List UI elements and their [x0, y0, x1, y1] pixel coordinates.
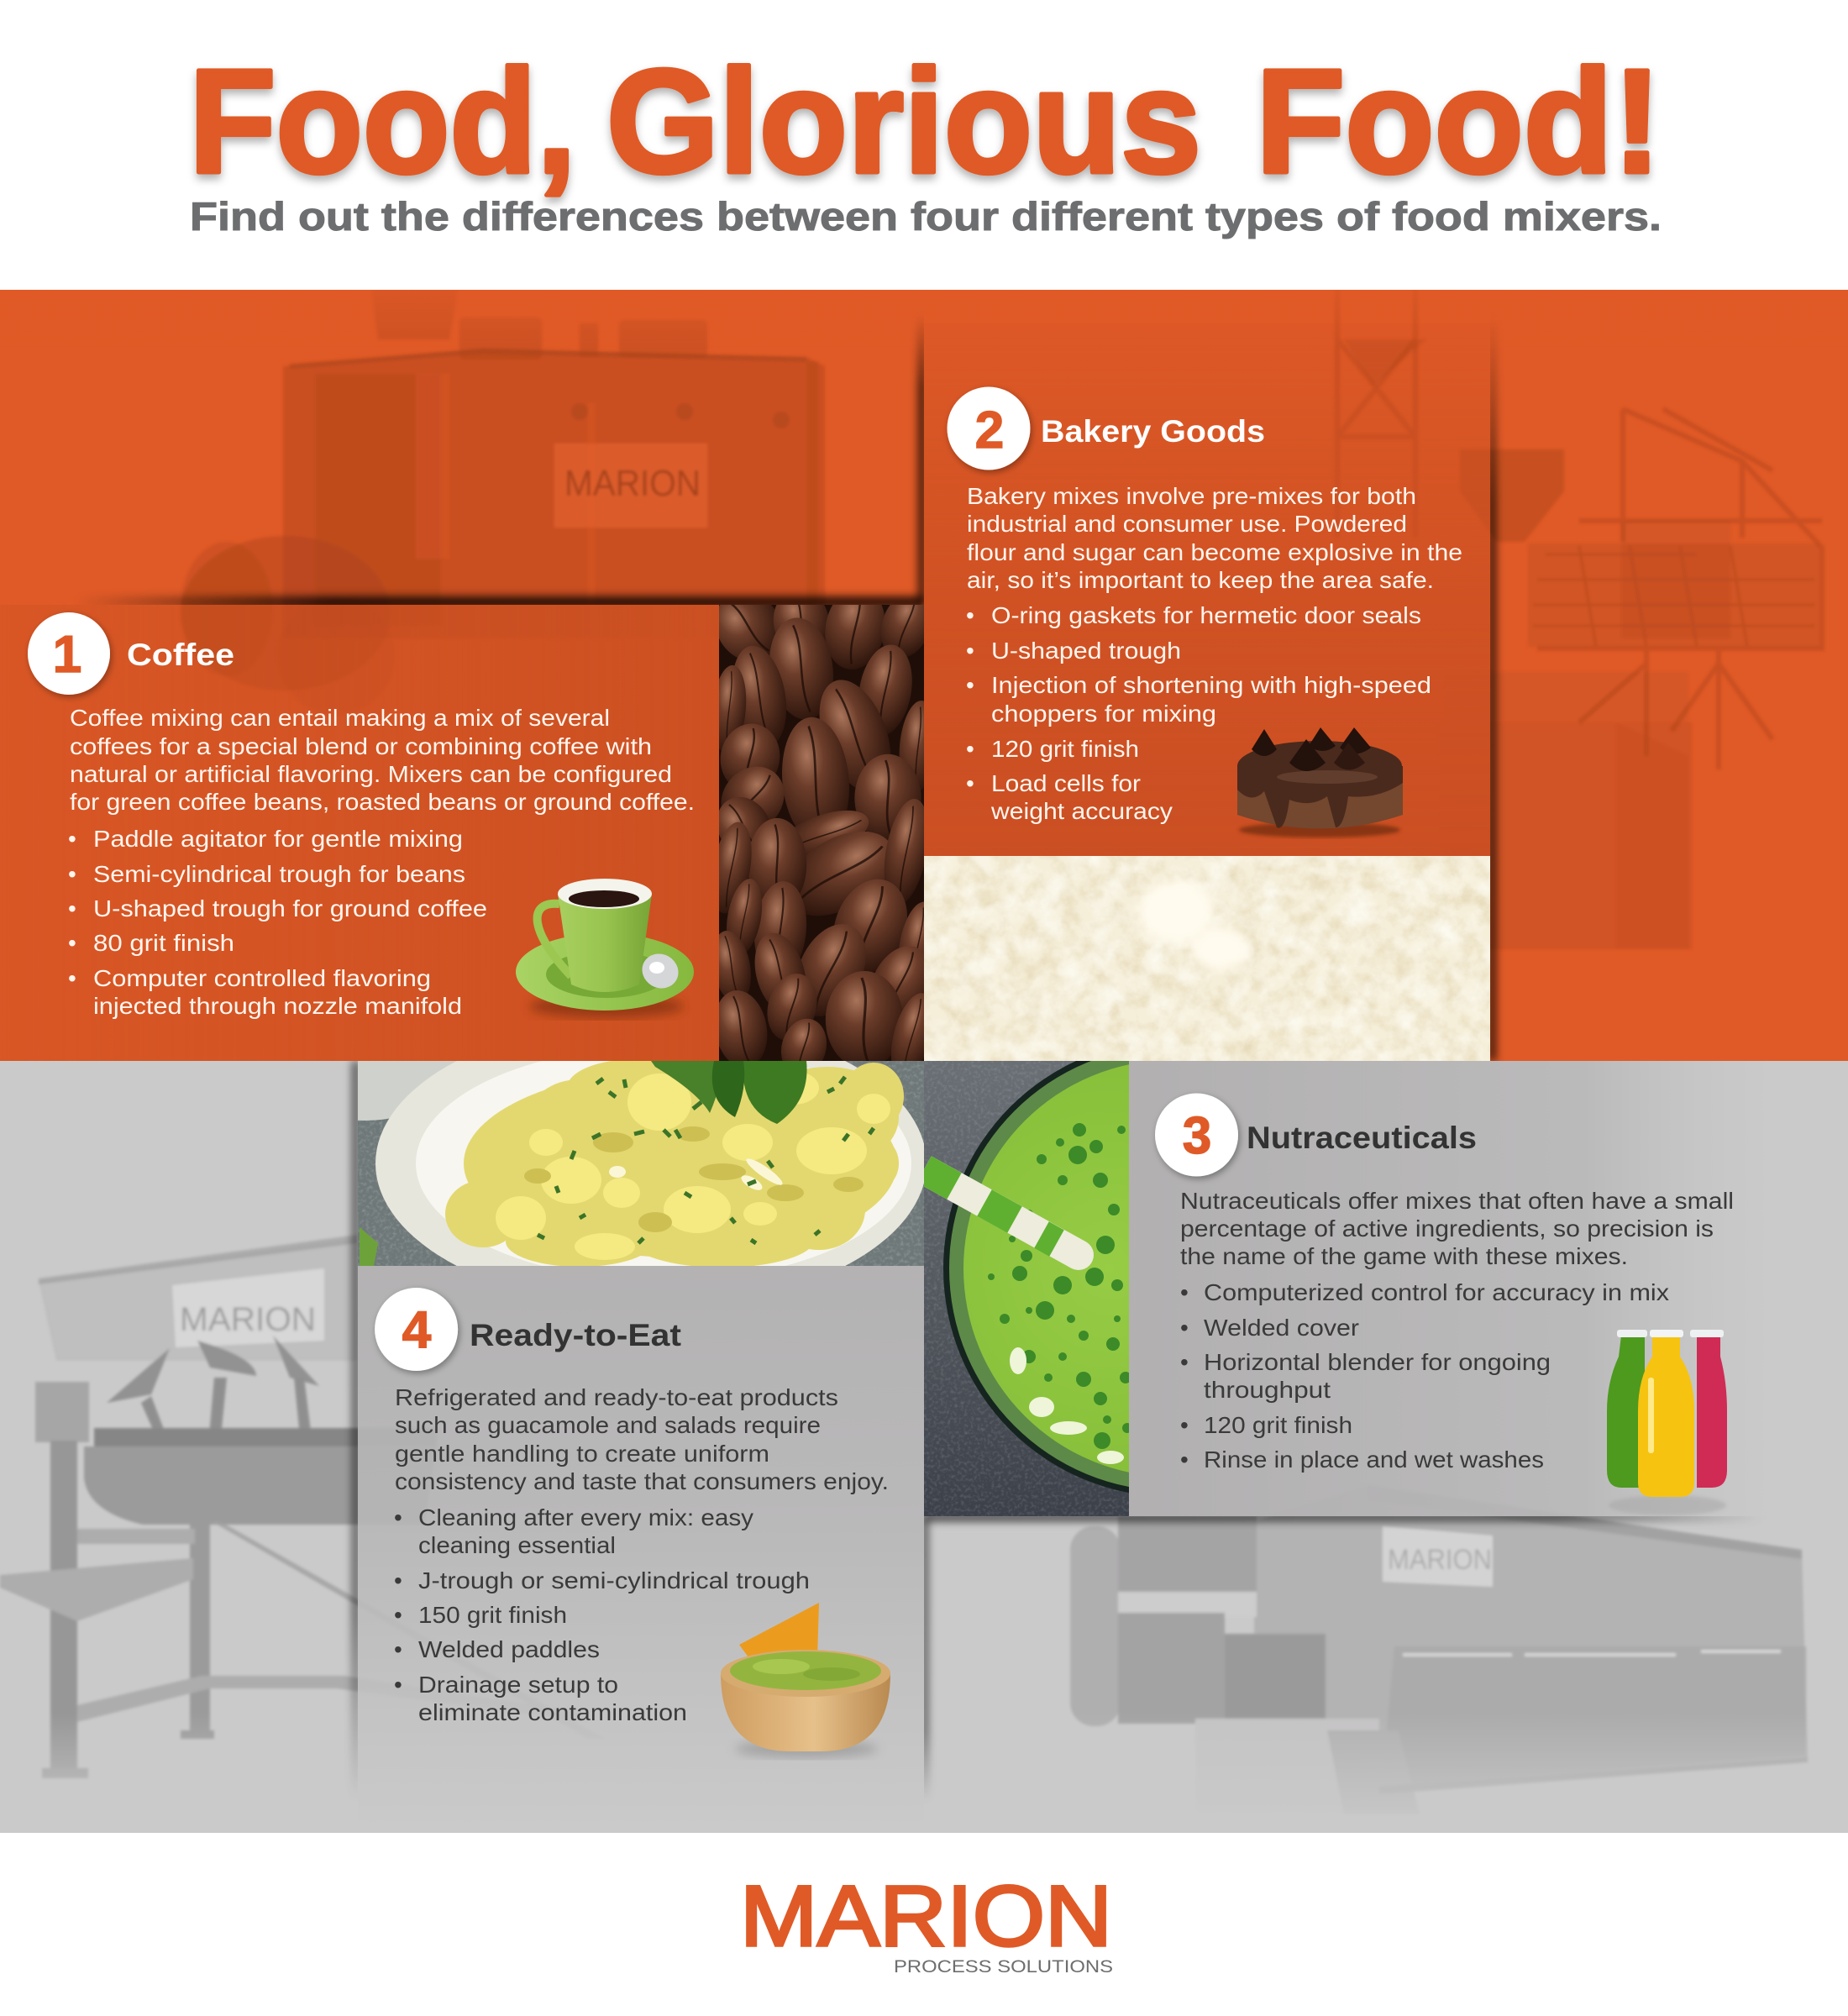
ready-to-eat description: gentle handling to create uniform — [395, 1441, 769, 1467]
title: Glorious — [606, 39, 1201, 204]
panel 4 left shadow — [352, 1061, 360, 1800]
nutraceuticals bullet list: • — [1180, 1349, 1189, 1375]
bakery description: industrial and consumer use. Powdered — [967, 511, 1407, 537]
ready-to-eat bullet list: • — [394, 1602, 402, 1628]
coffee description: for green coffee beans, roasted beans or ground coffee. — [70, 789, 695, 815]
orange background band — [0, 290, 1848, 1061]
logo tagline: PROCESS SOLUTIONS — [894, 1957, 1113, 1977]
bakery description — [967, 483, 1462, 593]
number badge 1: 1 — [53, 626, 81, 684]
icon: chocolate cake — [1237, 727, 1403, 837]
ready-to-eat description — [395, 1384, 889, 1494]
bakery bullet list: Injection of shortening with high-speed — [991, 672, 1431, 698]
ready-to-eat bullet list: Cleaning after every mix: easy — [418, 1504, 753, 1530]
nutraceuticals bullet list: Horizontal blender for ongoing — [1204, 1349, 1551, 1375]
ready-to-eat description: such as guacamole and salads require — [395, 1412, 821, 1438]
panel 3 bottom shadow — [924, 1514, 1764, 1521]
coffee bullet list: Computer controlled flavoring — [93, 965, 431, 991]
panel 4 right shadow — [921, 1516, 928, 1802]
ready-to-eat bullet list: • — [394, 1672, 402, 1698]
background machine: ribbon blender right — [1069, 1516, 1808, 1796]
coffee bullet list: Semi-cylindrical trough for beans — [93, 861, 465, 887]
bakery bullet list: • — [966, 672, 974, 698]
nutraceuticals bullet list: Rinse in place and wet washes — [1204, 1446, 1544, 1473]
photo: coffee beans — [719, 605, 924, 1061]
photo: flour — [924, 856, 1490, 1061]
bakery bullet list: U-shaped trough — [991, 638, 1181, 664]
panel 2 right shadow — [1488, 315, 1496, 1061]
coffee bullet list: • — [68, 965, 76, 991]
nutraceuticals bullet list: throughput — [1204, 1377, 1331, 1403]
title — [189, 39, 1662, 204]
background machine: bakery conveyor — [1337, 290, 1823, 949]
coffee description: natural or artificial flavoring. Mixers can be configured — [70, 761, 672, 787]
bakery bullet list: choppers for mixing — [991, 701, 1216, 727]
bakery bullet list: • — [966, 736, 974, 762]
panel: nutraceuticals — [924, 1040, 1781, 1521]
number badge 4 — [375, 1288, 458, 1371]
bakery bullet list: • — [966, 638, 974, 664]
panel 1 top shadow — [76, 596, 924, 608]
logo wordmark: MARION — [740, 1868, 1112, 1964]
coffee bullet list — [68, 826, 487, 1019]
panel 4 background — [358, 1061, 924, 1833]
number badge 4: 4 — [402, 1301, 432, 1359]
nutraceuticals bullet list: • — [1180, 1412, 1189, 1438]
nutraceuticals bullet list: • — [1180, 1315, 1189, 1341]
background machine: ribbon blender right: MARION — [1388, 1544, 1492, 1576]
number badge 2: 2 — [975, 402, 1004, 459]
bottom fade of grey band — [0, 1714, 1848, 1833]
ready-to-eat bullet list — [394, 1504, 810, 1725]
bakery bullet list: O-ring gaskets for hermetic door seals — [991, 602, 1421, 628]
photo: green smoothie — [924, 1061, 1129, 1516]
coffee description: Coffee mixing can entail making a mix of several — [70, 705, 610, 731]
title: Food, — [189, 39, 576, 204]
nutraceuticals bullet list — [1180, 1279, 1669, 1473]
ready-to-eat bullet list: • — [394, 1567, 402, 1593]
ready-to-eat bullet list: eliminate contamination — [418, 1699, 687, 1725]
coffee bullet list: injected through nozzle manifold — [93, 993, 462, 1019]
bakery bullet list: • — [966, 770, 974, 796]
bakery bullet list — [966, 602, 1431, 824]
coffee description — [70, 705, 695, 815]
title: Food! — [1256, 39, 1662, 204]
heading: bakery goods: Bakery Goods — [1041, 414, 1265, 449]
background machine: coffee mixer: MARION — [564, 463, 701, 504]
bakery bullet list: 120 grit finish — [991, 736, 1139, 762]
grey background band — [0, 1061, 1848, 1833]
icon: guacamole bowl with chip — [721, 1603, 890, 1758]
coffee description: coffees for a special blend or combining coffee with — [70, 733, 652, 759]
coffee bullet list: 80 grit finish — [93, 930, 234, 956]
number badge 2 — [948, 386, 1030, 470]
nutraceuticals description: Nutraceuticals offer mixes that often have a small — [1180, 1188, 1734, 1214]
panel: coffee — [0, 579, 944, 1083]
bakery bullet list: • — [966, 602, 974, 628]
background machine: coffee mixer — [181, 290, 825, 714]
background machine: ribbon blender left — [0, 1235, 358, 1779]
nutraceuticals description: percentage of active ingredients, so precision is — [1180, 1215, 1714, 1242]
nutraceuticals bullet list: Welded cover — [1204, 1315, 1359, 1341]
panel 3 background — [1129, 1061, 1781, 1516]
bakery description: Bakery mixes involve pre-mixes for both — [967, 483, 1416, 509]
subtitle: Find out the differences between four different types of food mixers. — [190, 194, 1662, 239]
heading: ready-to-eat: Ready-to-Eat — [470, 1318, 681, 1352]
icon: green coffee cup — [516, 879, 694, 1018]
ready-to-eat bullet list: • — [394, 1636, 402, 1662]
coffee bullet list: • — [68, 826, 76, 852]
bakery bullet list: weight accuracy — [990, 798, 1173, 824]
ready-to-eat bullet list: cleaning essential — [418, 1532, 616, 1558]
panel 1 background — [0, 605, 719, 1061]
coffee bullet list: • — [68, 861, 76, 887]
number badge 3: 3 — [1183, 1107, 1211, 1165]
coffee bullet list: Paddle agitator for gentle mixing — [93, 826, 463, 852]
background machine: ribbon blender left: MARION — [180, 1301, 316, 1338]
bakery description: air, so it’s important to keep the area safe. — [967, 567, 1434, 593]
panel 2 left shadow — [918, 315, 926, 605]
nutraceuticals description — [1180, 1188, 1734, 1269]
ready-to-eat bullet list: Welded paddles — [418, 1636, 600, 1662]
panel 2 background — [924, 323, 1490, 856]
bakery bullet list: Load cells for — [991, 770, 1141, 796]
nutraceuticals bullet list: • — [1180, 1279, 1189, 1305]
icon: juice bottles — [1607, 1330, 1727, 1515]
ready-to-eat bullet list: 150 grit finish — [418, 1602, 567, 1628]
nutraceuticals bullet list: 120 grit finish — [1204, 1412, 1352, 1438]
panel: ready-to-eat — [346, 1061, 934, 1793]
ready-to-eat description: consistency and taste that consumers enjoy. — [395, 1468, 889, 1494]
ready-to-eat bullet list: J-trough or semi-cylindrical trough — [418, 1567, 810, 1593]
heading: nutraceuticals: Nutraceuticals — [1247, 1121, 1477, 1155]
logo — [740, 1868, 1113, 1977]
number badge 3 — [1155, 1094, 1238, 1176]
ready-to-eat bullet list: Drainage setup to — [418, 1672, 618, 1698]
coffee bullet list: • — [68, 895, 76, 921]
heading: coffee: Coffee — [127, 638, 234, 672]
coffee bullet list: • — [68, 930, 76, 956]
photo: potato salad — [358, 1061, 924, 1266]
nutraceuticals bullet list: • — [1180, 1446, 1189, 1473]
ready-to-eat description: Refrigerated and ready-to-eat products — [395, 1384, 838, 1410]
top fade of orange band — [0, 290, 1848, 349]
nutraceuticals description: the name of the game with these mixes. — [1180, 1243, 1628, 1269]
number badge 1 — [28, 612, 110, 695]
coffee bullet list: U-shaped trough for ground coffee — [93, 895, 487, 921]
panel: bakery goods — [918, 315, 1496, 1061]
ready-to-eat bullet list: • — [394, 1504, 402, 1530]
nutraceuticals bullet list: Computerized control for accuracy in mix — [1204, 1279, 1669, 1305]
bakery description: flour and sugar can become explosive in the — [967, 539, 1462, 565]
